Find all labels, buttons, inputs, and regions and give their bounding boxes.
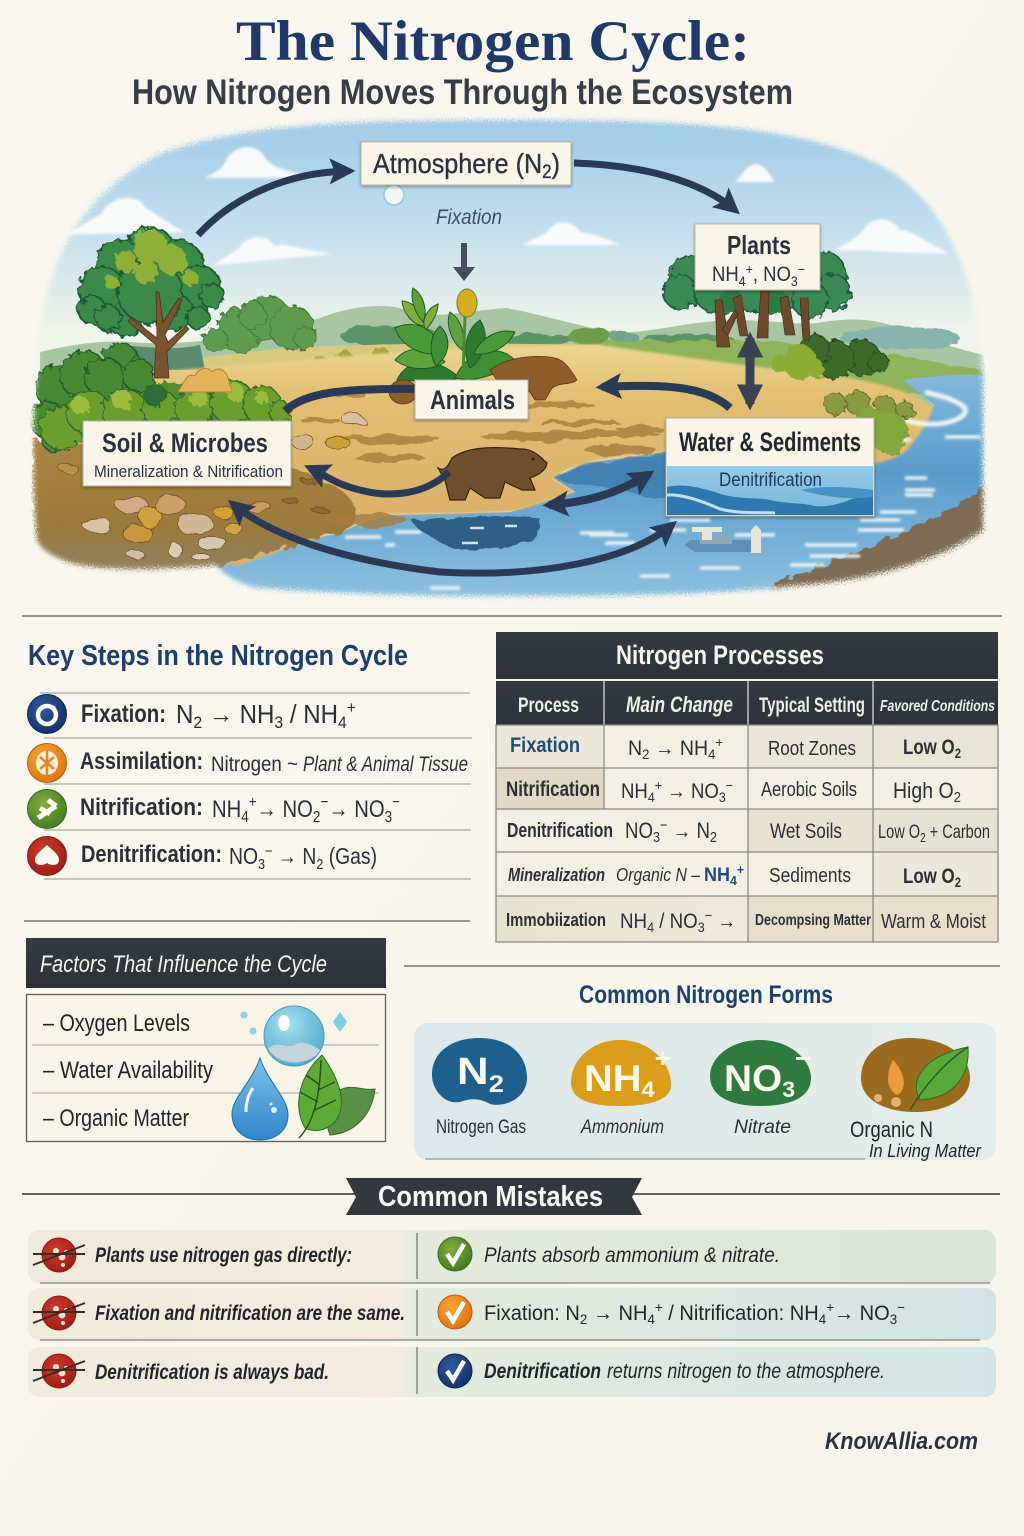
row: fixation: → NH <box>649 737 708 760</box>
label: atmosphere: 2 <box>542 162 552 183</box>
step: fixation: N <box>176 699 195 729</box>
row: fixation versus nitrification: / Nitrification: NH <box>663 1302 819 1325</box>
step: nitrification: + <box>249 794 257 811</box>
row: fixation versus nitrification <box>28 1288 996 1340</box>
row: mineralization <box>508 862 961 890</box>
icon: assimilation <box>28 744 66 782</box>
step: denitrification: − <box>265 843 273 860</box>
row: nitrification: 3 <box>719 789 726 805</box>
row: fixation versus nitrification: → NH <box>587 1302 647 1325</box>
step: fixation: → NH <box>202 699 274 729</box>
step: nitrification <box>28 790 400 828</box>
row: mineralization: 2 <box>955 874 961 890</box>
green fields <box>573 340 985 395</box>
row: denitrification: NO <box>625 818 658 843</box>
section: common mistakes <box>22 1178 1000 1397</box>
step: nitrification: 4 <box>241 809 249 826</box>
row: fixation: N <box>628 737 643 760</box>
row: plants use nitrogen gas <box>28 1230 996 1283</box>
water highlights <box>345 392 981 588</box>
label: atmosphere <box>361 142 571 185</box>
row: nitrification <box>506 777 961 806</box>
row: fixation <box>510 734 961 762</box>
distant tree lines <box>340 326 960 349</box>
label: plants: Plants <box>727 230 791 260</box>
distant left tree <box>203 296 316 352</box>
row: denitrification is bad: Denitrification <box>484 1360 601 1383</box>
row: nitrification: 2 <box>954 789 961 806</box>
step: denitrification <box>28 836 377 876</box>
table header row <box>496 681 998 725</box>
row: fixation: 4 <box>708 746 716 762</box>
row: plants use nitrogen gas: Plants use nitrogen gas directly: <box>95 1244 352 1267</box>
far hills <box>40 306 985 408</box>
sand texture <box>300 392 664 527</box>
plant <box>395 288 515 382</box>
row: denitrification: + Carbon <box>926 822 990 843</box>
row: denitrification is bad: returns nitrogen to the atmosphere. <box>607 1360 885 1383</box>
ribbon heading: Common Mistakes <box>378 1181 603 1213</box>
label: water and sediments <box>666 418 874 516</box>
panel: nitrogen forms <box>414 1023 996 1161</box>
row: immobilization: / NO <box>654 910 698 933</box>
label: plants: 4 <box>739 273 746 289</box>
factor: oxygen levels: – Oxygen Levels <box>43 1010 190 1037</box>
step: fixation: 2 <box>193 713 202 732</box>
step: nitrification: → NO <box>328 796 385 823</box>
right trees <box>663 251 850 347</box>
row: nitrification: Nitrification <box>506 778 600 801</box>
rocks <box>59 414 364 560</box>
table header row: Process <box>518 694 579 717</box>
step: fixation: 4 <box>338 713 347 732</box>
step: denitrification: Denitrification: <box>81 841 222 868</box>
bay shading <box>553 452 670 500</box>
left tree <box>78 227 224 378</box>
table header row: Typical Setting <box>759 694 865 717</box>
row: fixation: 2 <box>955 745 961 761</box>
icon: leaves <box>299 1055 375 1138</box>
icon: green check <box>438 1237 472 1271</box>
boat reflection <box>685 525 762 553</box>
icon: blue check <box>438 1354 472 1388</box>
row: fixation versus nitrification: Fixation and nitrification are the same. <box>95 1302 405 1325</box>
label: soil and microbes: Soil & Microbes <box>102 428 268 458</box>
arrow: long water and soil exchange <box>233 504 672 573</box>
step: denitrification: → N <box>272 843 316 869</box>
brand footer: KnowAllia.com <box>825 1428 978 1455</box>
arrow: fixation down <box>461 243 467 267</box>
icon: bubble <box>240 1006 347 1066</box>
panel: key steps <box>28 640 472 879</box>
step: denitrification: (Gas) <box>323 843 377 869</box>
step: nitrification: 3 <box>385 809 392 826</box>
row: immobilization <box>506 907 986 935</box>
step: fixation: + <box>347 698 356 717</box>
arrow: soil and water double <box>549 474 649 505</box>
row: fixation: + <box>715 734 723 750</box>
small olive bushes <box>314 347 389 360</box>
label: soil and microbes <box>83 421 291 486</box>
row: immobilization: Warm & Moist <box>881 911 986 933</box>
form: NO3: 3 <box>782 1077 795 1102</box>
label: soil and microbes: Mineralization & Nitrification <box>94 462 283 481</box>
label: plants <box>695 224 820 290</box>
form: N2: 2 <box>489 1071 504 1098</box>
label: atmosphere: Atmosphere (N <box>373 148 561 179</box>
row: fixation versus nitrification: − <box>897 1299 905 1315</box>
arrow: water to animals <box>602 386 730 408</box>
form: NO3: NO <box>724 1058 780 1099</box>
form: organic N: In Living Matter <box>869 1141 982 1161</box>
label: fixation: Fixation <box>436 206 502 229</box>
row: nitrification: 4 <box>648 789 655 805</box>
right bushes <box>771 335 914 456</box>
step: assimilation: Nitrogen ~ <box>211 753 298 776</box>
factor: water availability: – Water Availability <box>43 1057 213 1084</box>
label: animals <box>415 380 528 419</box>
step: nitrification: NH <box>212 796 247 823</box>
heading: common nitrogen forms: Common Nitrogen Forms <box>579 981 833 1009</box>
label: water and sediments: Denitrification <box>719 470 822 491</box>
row: immobilization: NH <box>620 910 650 933</box>
row: fixation versus nitrification: 3 <box>890 1311 897 1327</box>
arrow: animal to soil <box>310 468 449 494</box>
row: nitrification: NH <box>621 780 651 803</box>
row: plants use nitrogen gas: Plants absorb ammonium & nitrate. <box>484 1244 780 1267</box>
step: nitrification: → NO <box>257 796 313 823</box>
row: denitrification <box>507 817 990 846</box>
label: plants: 3 <box>791 273 798 289</box>
label: plants: , NO <box>753 263 791 286</box>
label: animals: Animals <box>430 385 515 415</box>
step: denitrification: 3 <box>258 856 265 873</box>
form: NO3 <box>710 1040 811 1138</box>
icon: mistake <box>33 1238 85 1272</box>
landscape scene <box>0 110 1024 610</box>
row: immobilization: → <box>712 910 736 933</box>
form: organic N: Organic N <box>850 1117 933 1142</box>
form: NO3: Nitrate <box>734 1117 791 1138</box>
label: plants: + <box>746 261 753 277</box>
form: NH4: NH <box>584 1058 637 1099</box>
animal behind label <box>389 356 577 404</box>
step: nitrification: − <box>320 794 328 811</box>
icon: mistake <box>33 1354 85 1388</box>
form: N2 <box>432 1038 527 1138</box>
table cell tints <box>496 725 998 942</box>
row: fixation: Low O <box>903 736 967 759</box>
arrow head: fixation down <box>453 267 475 281</box>
title: The Nitrogen Cycle: <box>236 10 750 73</box>
panel: factors <box>26 938 386 1142</box>
step: denitrification: 2 <box>316 856 323 873</box>
form: N2: N <box>457 1051 484 1093</box>
arrow: soil to animals <box>285 389 420 411</box>
icon: water drop <box>232 1058 288 1140</box>
row: denitrification: Wet Soils <box>770 820 842 843</box>
row: immobilization: − <box>705 907 712 923</box>
table title bar <box>496 632 998 679</box>
row: fixation versus nitrification: Fixation: N <box>484 1302 584 1325</box>
row: fixation: Fixation <box>510 734 580 757</box>
step: assimilation: Plant & Animal Tissue <box>303 753 468 776</box>
form: NH4: + <box>655 1043 671 1073</box>
label: atmosphere: ) <box>552 148 560 179</box>
row: fixation versus nitrification: + <box>826 1299 834 1315</box>
row: mineralization: Mineralization <box>508 865 605 885</box>
row: mineralization: + <box>737 862 744 877</box>
row: denitrification: → N <box>667 818 710 843</box>
arrow: plants and water exchange <box>746 338 754 404</box>
step: fixation: 3 <box>274 713 283 732</box>
form: NO3: − <box>795 1043 811 1073</box>
icon: mistake <box>33 1296 85 1330</box>
factor: organic matter: – Organic Matter <box>43 1105 189 1132</box>
clouds <box>62 147 950 265</box>
factors header <box>26 938 386 988</box>
step: fixation <box>28 694 356 734</box>
row: fixation versus nitrification: → NO <box>834 1302 890 1325</box>
row: mineralization: NH <box>704 865 731 886</box>
animal in foreground <box>438 448 547 500</box>
label: plants: − <box>798 261 805 277</box>
row: denitrification: Low O <box>878 822 933 843</box>
factors header: Factors That Influence the Cycle <box>40 951 327 978</box>
row: denitrification is bad: Denitrification is always bad. <box>95 1361 329 1384</box>
icon: fixation <box>28 694 66 734</box>
water body <box>200 375 990 610</box>
sand <box>80 345 933 565</box>
table header row: Main Change <box>626 692 733 717</box>
step: fixation: / NH <box>283 699 338 729</box>
step: nitrification: Nitrification: <box>80 794 203 821</box>
dark water reflection <box>413 516 540 549</box>
form: N2: Nitrogen Gas <box>436 1117 526 1138</box>
icon: orange check <box>438 1295 472 1329</box>
row: denitrification: 2 <box>920 830 926 845</box>
row: denitrification: Denitrification <box>507 820 613 842</box>
row: fixation versus nitrification: 4 <box>819 1311 826 1327</box>
row: mineralization: Sediments <box>769 865 851 887</box>
row: immobilization: 4 <box>647 919 654 935</box>
step: nitrification: 2 <box>313 809 321 826</box>
label: water and sediments: Water & Sediments <box>679 427 861 457</box>
icon: nitrification <box>28 790 66 828</box>
left bushes <box>30 343 291 452</box>
form: NH4: 4 <box>641 1077 655 1102</box>
arrow: trees to atmosphere <box>198 171 349 235</box>
subtitle: How Nitrogen Moves Through the Ecosystem <box>132 73 793 112</box>
row: immobilization: Immobiization <box>506 910 606 930</box>
row: fixation: 2 <box>642 746 650 762</box>
row: nitrification: − <box>726 777 733 793</box>
arrow: atmosphere to plants <box>574 163 735 210</box>
step: nitrification: − <box>392 794 400 811</box>
row: fixation versus nitrification: 4 <box>647 1311 655 1327</box>
row: nitrification: Aerobic Soils <box>761 779 857 801</box>
row: denitrification is bad <box>28 1347 996 1397</box>
row: fixation versus nitrification: 2 <box>580 1311 587 1327</box>
row: denitrification: 3 <box>653 829 660 846</box>
row: denitrification: − <box>660 817 668 834</box>
row: nitrification: High O <box>893 778 961 803</box>
row: fixation: Root Zones <box>768 738 856 760</box>
form: organic N <box>850 1038 982 1161</box>
row: immobilization: Decompsing Matter <box>755 912 871 929</box>
table title bar: Nitrogen Processes <box>616 640 824 670</box>
step: fixation: Fixation: <box>81 700 166 728</box>
droplet near atmosphere <box>384 185 404 205</box>
heading: key steps: Key Steps in the Nitrogen Cycle <box>28 640 408 672</box>
form: NH4 <box>571 1040 671 1138</box>
row: nitrification: → NO <box>662 780 719 803</box>
row: mineralization: Organic N – <box>616 865 701 885</box>
step: denitrification: NO <box>229 843 264 869</box>
soil bank <box>32 440 356 575</box>
form: NH4: Ammonium <box>580 1117 664 1138</box>
dark brown shore wedge <box>768 482 989 594</box>
row: immobilization: 3 <box>698 919 705 935</box>
step: assimilation <box>28 744 468 782</box>
label: plants: NH <box>712 263 742 286</box>
step: assimilation: Assimilation: <box>80 748 203 775</box>
table: nitrogen processes <box>496 632 998 942</box>
icon: denitrification <box>28 836 66 876</box>
row: denitrification: 2 <box>710 829 717 846</box>
row: fixation versus nitrification: + <box>655 1299 663 1315</box>
row: mineralization: Low O <box>903 865 967 888</box>
row: nitrification: + <box>655 777 662 793</box>
row: mineralization: 4 <box>730 873 738 888</box>
